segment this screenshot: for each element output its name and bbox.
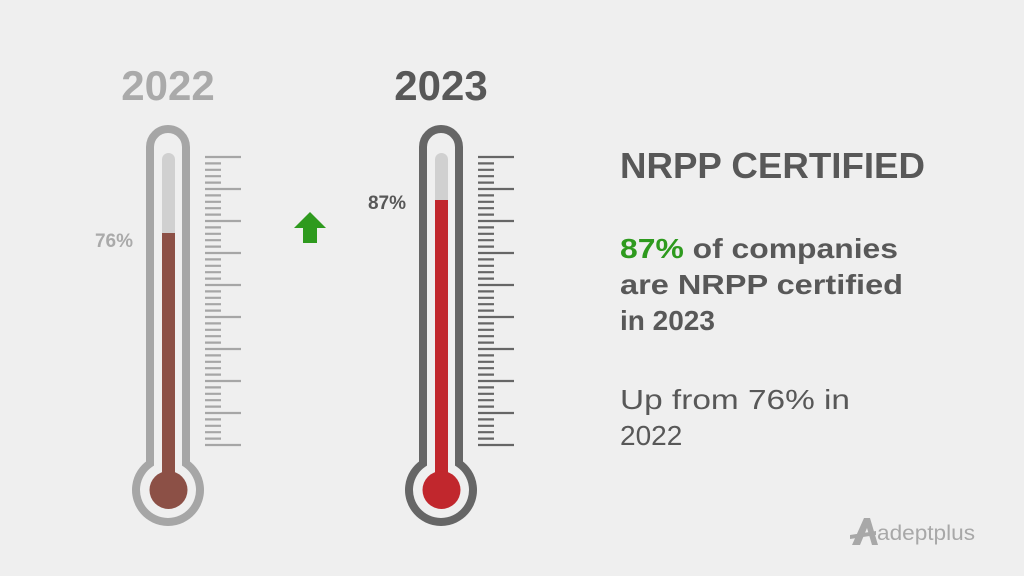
text block: main stat: 87% of companies bbox=[620, 233, 898, 264]
icon: green up arrow bbox=[294, 212, 326, 243]
thermometer: 2023 bbox=[409, 129, 514, 522]
label: 87%: 87% bbox=[368, 193, 406, 214]
logo: adeptplus bbox=[850, 518, 975, 545]
text block: main stat bbox=[620, 233, 903, 336]
text block: comparison: 2022 bbox=[620, 420, 682, 451]
heading: 2023: 2023 bbox=[394, 62, 488, 109]
text block: main stat: are NRPP certified bbox=[620, 269, 903, 300]
text block: comparison bbox=[620, 384, 850, 451]
label: 76%: 76% bbox=[95, 231, 133, 252]
thermometer: 2022 bbox=[136, 129, 241, 522]
title: NRPP CERTIFIED: NRPP CERTIFIED bbox=[620, 145, 925, 186]
heading: 2022: 2022 bbox=[121, 62, 215, 109]
text block: comparison: Up from 76% in bbox=[620, 384, 850, 415]
text block: main stat: in 2023 bbox=[620, 305, 715, 336]
logo: adeptplus: adeptplus bbox=[877, 522, 975, 545]
